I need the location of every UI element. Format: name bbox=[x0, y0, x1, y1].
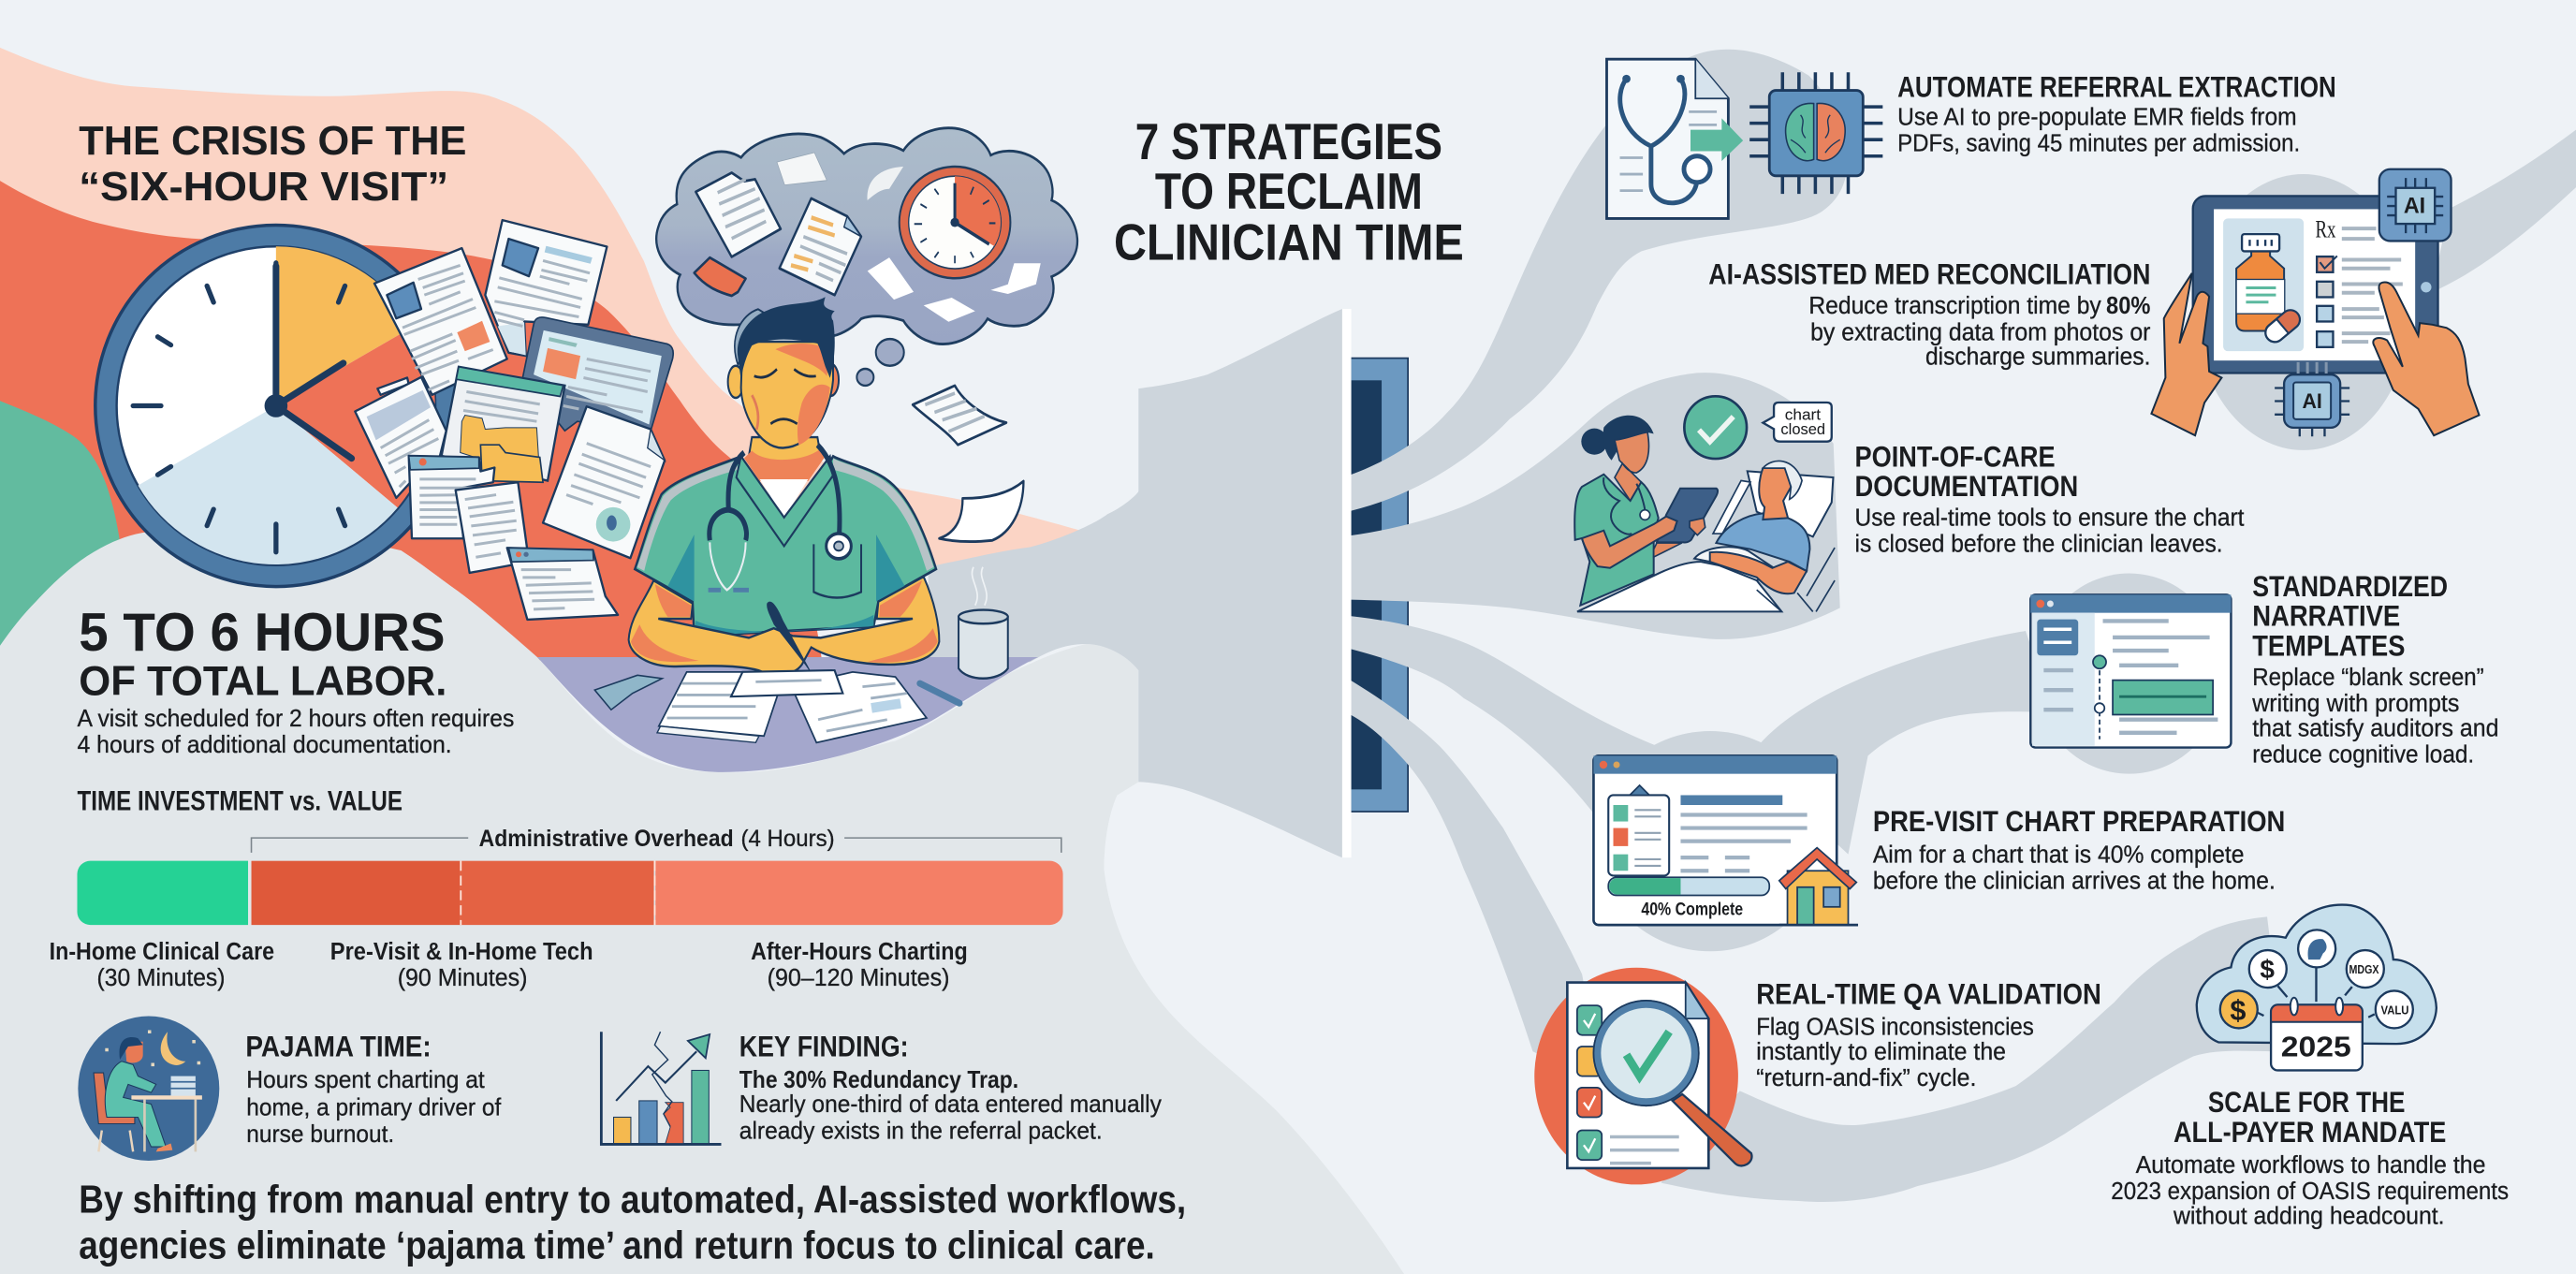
icon: referral extraction bbox=[1606, 59, 1882, 218]
strategy 5 text: PRE-VISIT CHART PREPARATION bbox=[1873, 804, 2285, 838]
nurse: ears and face bbox=[728, 342, 839, 447]
icon: med reconciliation tablet: Rx bbox=[2315, 214, 2335, 242]
strategy 2 text: by extracting data from photos or bbox=[1810, 317, 2151, 345]
stacked time bar chart bbox=[50, 827, 1063, 991]
desk bbox=[537, 657, 1038, 772]
AI chip, bottom bbox=[2275, 374, 2349, 436]
callout: key finding: The 30% Redundancy Trap. bbox=[739, 1067, 1018, 1093]
icon: pre-visit chart bbox=[1593, 755, 1858, 925]
stacked time bar chart: (30 Minutes) bbox=[97, 963, 225, 991]
coffee cup bbox=[959, 567, 1008, 679]
white divider bar bbox=[1342, 309, 1352, 857]
conclusion statement: By shifting from manual entry to automated, AI-assisted workflows, bbox=[79, 1177, 1186, 1221]
callout: pajama time: Hours spent charting at bbox=[246, 1067, 485, 1093]
conclusion statement: agencies eliminate ‘pajama time’ and return focus to clinical care. bbox=[79, 1223, 1155, 1267]
strategy 3 text bbox=[1855, 439, 2245, 558]
callout: key finding: KEY FINDING: bbox=[739, 1030, 909, 1063]
strategy 3 text: POINT-OF-CARE bbox=[1855, 439, 2056, 473]
patient in bed bbox=[1577, 461, 1835, 611]
headline stat: 5 TO 6 HOURS bbox=[79, 603, 446, 663]
icon: all-payer cloud bbox=[2197, 905, 2437, 1070]
icon: redundancy chart bbox=[601, 1032, 721, 1144]
strategy 1 text: Use AI to pre-populate EMR fields from bbox=[1897, 102, 2297, 130]
strategy 7 text: 2023 expansion of OASIS requirements bbox=[2111, 1177, 2509, 1205]
icon: narrative template bbox=[2030, 594, 2231, 748]
icon: QA validation bbox=[1534, 968, 1751, 1184]
strategy 4 text: STANDARDIZED bbox=[2252, 569, 2448, 603]
strategy 4 text: Replace “blank screen” bbox=[2252, 663, 2484, 691]
headline stat: OF TOTAL LABOR. bbox=[79, 657, 446, 704]
title: 7 strategies: CLINICIAN TIME bbox=[1114, 213, 1464, 271]
strategy 2 text bbox=[1708, 257, 2151, 371]
illustration: large clock bbox=[95, 225, 457, 587]
icon: point of care bbox=[1574, 396, 1835, 611]
strategy 5 text: Aim for a chart that is 40% complete bbox=[1873, 840, 2244, 868]
icon: all-payer cloud: VALU bbox=[2380, 1003, 2409, 1017]
strategy 7 text: without adding headcount. bbox=[2173, 1202, 2445, 1230]
strategy 6 text: “return-and-fix” cycle. bbox=[1756, 1063, 1976, 1091]
strategy 7 text bbox=[2111, 1085, 2509, 1230]
conclusion statement bbox=[79, 1177, 1186, 1267]
strategy 1 text bbox=[1897, 70, 2336, 156]
strategy 7 text: ALL-PAYER MANDATE bbox=[2174, 1115, 2446, 1149]
stacked time bar chart: (90–120 Minutes) bbox=[768, 963, 949, 991]
strategy 3 text: is closed before the clinician leaves. bbox=[1855, 530, 2223, 558]
title: 7 strategies: TO RECLAIM bbox=[1155, 163, 1423, 220]
strategy 4 text: that satisfy auditors and bbox=[2252, 713, 2499, 741]
AI chip, bottom: AI bbox=[2302, 389, 2322, 413]
strategy 2 text: 80% bbox=[2106, 291, 2150, 319]
thought cloud and scene bbox=[629, 128, 1077, 678]
title: crisis: THE CRISIS OF THE bbox=[79, 118, 466, 164]
strategy 1 text: PDFs, saving 45 minutes per admission. bbox=[1897, 128, 2300, 156]
icon: all-payer cloud: $ bbox=[2260, 955, 2275, 984]
nurse: arms and pen bbox=[629, 577, 939, 678]
strategy 2 text: discharge summaries. bbox=[1925, 343, 2150, 371]
strategy 2 text: Reduce transcription time by bbox=[1808, 291, 2102, 319]
icon: all-payer cloud: $ bbox=[2230, 994, 2246, 1026]
strategy 2 text: AI-ASSISTED MED RECONCILIATION bbox=[1708, 257, 2150, 291]
strategy 6 text: Flag OASIS inconsistencies bbox=[1756, 1013, 2034, 1041]
blue panel behind funnel bbox=[1351, 359, 1408, 812]
icon: med reconciliation tablet bbox=[2151, 169, 2480, 436]
title: crisis bbox=[79, 118, 466, 210]
stacked time bar chart: After-Hours Charting bbox=[751, 937, 968, 965]
icon: pre-visit chart: 40% Complete bbox=[1641, 901, 1743, 920]
speech bubble: chart closed: closed bbox=[1780, 420, 1825, 438]
flying papers bbox=[913, 386, 1023, 542]
speech bubble: chart closed: chart bbox=[1785, 405, 1821, 423]
speech bubble: chart closed bbox=[1763, 403, 1832, 442]
left hand bbox=[2151, 273, 2221, 435]
strategy 5 text bbox=[1873, 804, 2285, 895]
funnel and ribbons bbox=[929, 50, 2576, 1202]
nurse: hair bbox=[735, 297, 835, 380]
title: 7 strategies: 7 STRATEGIES bbox=[1135, 113, 1442, 170]
strategy 6 text: instantly to eliminate the bbox=[1756, 1037, 2006, 1065]
strategy 5 text: before the clinician arrives at the home. bbox=[1873, 867, 2276, 895]
strategy 4 text: writing with prompts bbox=[2251, 689, 2459, 717]
title: crisis: “SIX-HOUR VISIT” bbox=[79, 164, 448, 210]
strategy 4 text: reduce cognitive load. bbox=[2252, 740, 2474, 768]
house bbox=[1779, 848, 1858, 925]
section heading: time investment: TIME INVESTMENT vs. VALUE bbox=[77, 785, 402, 816]
stacked time bar chart: Administrative Overhead bbox=[479, 827, 734, 852]
callout: pajama time: nurse burnout. bbox=[246, 1121, 394, 1148]
calendar 2025 bbox=[2271, 998, 2363, 1070]
calendar 2025: 2025 bbox=[2281, 1031, 2351, 1062]
right hand bbox=[2373, 282, 2480, 435]
icon: all-payer cloud: MDGX bbox=[2349, 963, 2379, 976]
stacked time bar chart: Pre-Visit & In-Home Tech bbox=[330, 937, 593, 965]
strategy 6 text: REAL-TIME QA VALIDATION bbox=[1756, 976, 2101, 1010]
callout: pajama time bbox=[245, 1030, 502, 1148]
stacked time bar chart: In-Home Clinical Care bbox=[50, 937, 274, 965]
callout: pajama time: home, a primary driver of bbox=[246, 1095, 502, 1121]
desk papers bbox=[594, 670, 959, 742]
nurse: stethoscope bbox=[709, 445, 861, 598]
title: 7 strategies bbox=[1114, 113, 1464, 271]
AI chip, top bbox=[2379, 169, 2452, 241]
icon: pajama time bbox=[78, 1017, 219, 1161]
strategy 7 text: SCALE FOR THE bbox=[2208, 1085, 2405, 1119]
headline stat: 4 hours of additional documentation. bbox=[77, 732, 452, 758]
illustration: pile of documents bbox=[355, 220, 673, 620]
callout: key finding: Nearly one-third of data entered manually bbox=[739, 1091, 1162, 1118]
thought: floating pages bbox=[695, 153, 1041, 322]
strategy 7 text: Automate workflows to handle the bbox=[2136, 1150, 2485, 1179]
stacked time bar chart: (90 Minutes) bbox=[398, 963, 527, 991]
strategy 4 text: NARRATIVE bbox=[2252, 599, 2400, 633]
AI chip, top: AI bbox=[2404, 193, 2425, 218]
nurse with tablet bbox=[1574, 416, 1718, 606]
callout: key finding: already exists in the referral packet. bbox=[739, 1118, 1103, 1144]
callout: pajama time: PAJAMA TIME: bbox=[245, 1030, 432, 1063]
thought: clock bbox=[900, 167, 1010, 278]
strategy 3 text: Use real-time tools to ensure the chart bbox=[1855, 504, 2245, 532]
strategy 4 text: TEMPLATES bbox=[2252, 628, 2405, 662]
callout: key finding bbox=[739, 1030, 1162, 1144]
strategy 3 text: DOCUMENTATION bbox=[1855, 469, 2078, 503]
stacked time bar chart: (4 Hours) bbox=[741, 827, 835, 852]
strategy 4 text bbox=[2251, 569, 2499, 768]
headline stat bbox=[77, 603, 514, 758]
strategy 1 text: AUTOMATE REFERRAL EXTRACTION bbox=[1897, 70, 2336, 104]
headline stat: A visit scheduled for 2 hours often requires bbox=[77, 706, 514, 732]
strategy 6 text bbox=[1756, 976, 2101, 1091]
illustration: tired nurse bbox=[629, 297, 939, 678]
